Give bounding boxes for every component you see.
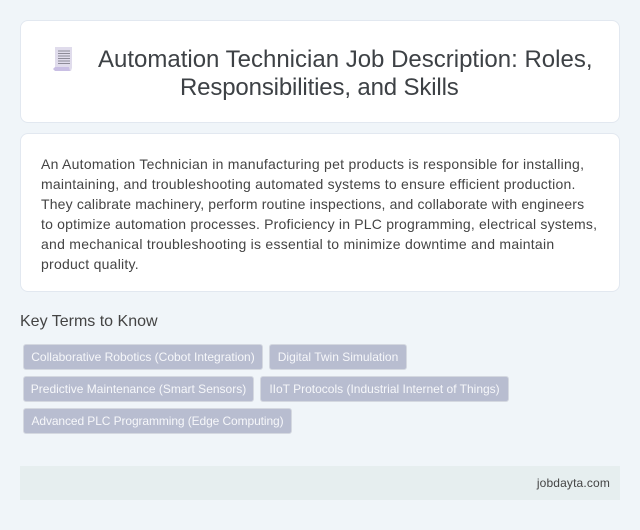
title — [98, 46, 592, 101]
tags — [23, 344, 509, 434]
description text — [41, 156, 597, 272]
description text: and mechanical troubleshooting is essential to minimize downtime and maintain — [41, 236, 554, 252]
icon: document — [53, 47, 72, 71]
footer — [20, 466, 620, 500]
title: Responsibilities, and Skills — [180, 74, 459, 101]
tag: digital twin — [269, 344, 407, 370]
footer source text: jobdayta.com — [537, 476, 610, 490]
description panel — [20, 133, 620, 292]
description text: product quality. — [41, 256, 139, 272]
title: Automation Technician Job Description: Roles, — [98, 46, 592, 73]
header panel — [20, 20, 620, 123]
heading: key terms: Key Terms to Know — [20, 313, 158, 330]
tag: iiot: IIoT Protocols (Industrial Internet of Things) — [269, 382, 500, 396]
description text: maintaining, and troubleshooting automated systems to ensure efficient production. — [41, 176, 576, 192]
tag: digital twin: Digital Twin Simulation — [278, 350, 398, 364]
tag: plc: Advanced PLC Programming (Edge Computing) — [31, 414, 284, 428]
description text: They calibrate machinery, perform routine inspections, and collaborate with engineers — [41, 196, 584, 212]
tag: cobot — [23, 344, 263, 370]
description text: An Automation Technician in manufacturing pet products is responsible for installing, — [41, 156, 584, 172]
tag: predictive maintenance: Predictive Maintenance (Smart Sensors) — [31, 382, 246, 396]
tag: plc — [23, 408, 292, 434]
tag: cobot: Collaborative Robotics (Cobot Integration) — [31, 350, 255, 364]
tag: predictive maintenance — [23, 376, 254, 402]
description text: to optimize automation processes. Proficiency in PLC programming, electrical systems, — [41, 216, 597, 232]
tag: iiot — [260, 376, 509, 402]
